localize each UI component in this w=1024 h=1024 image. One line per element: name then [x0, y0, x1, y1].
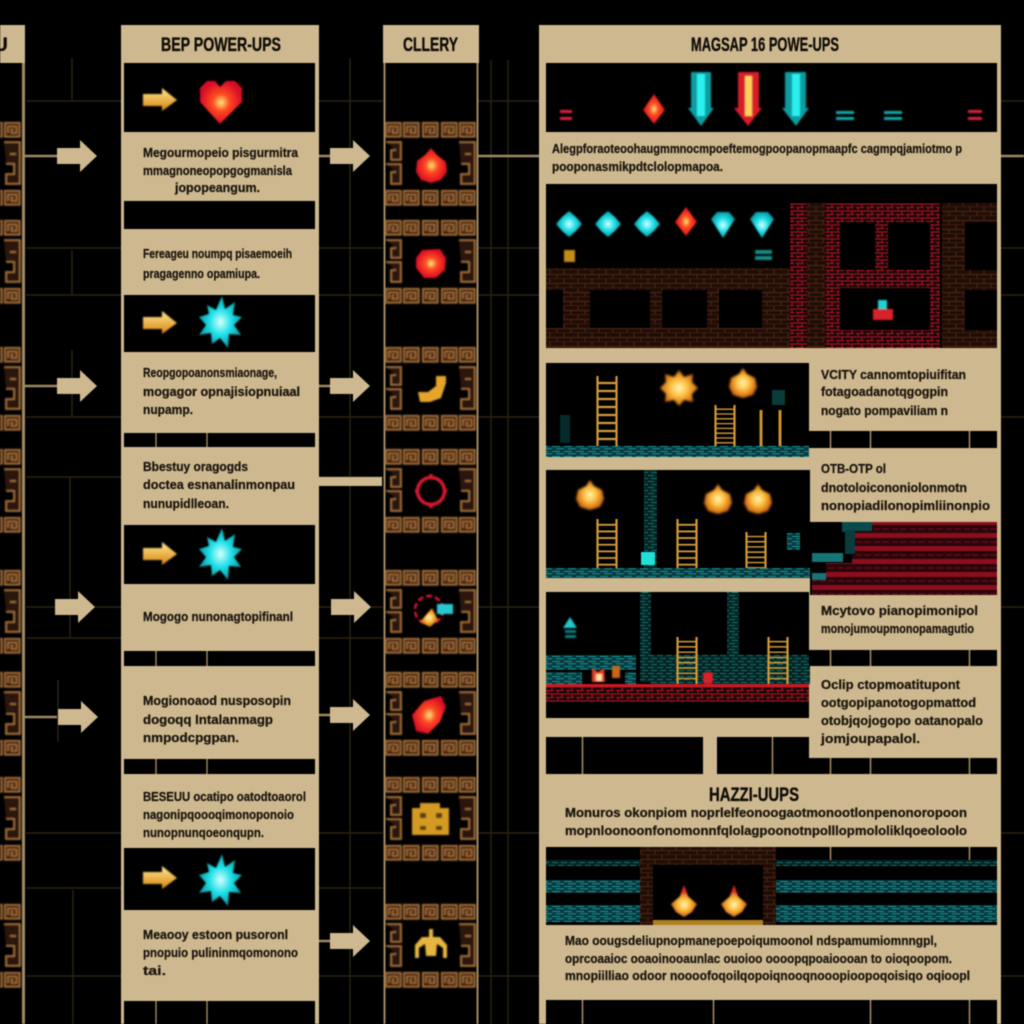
icon: red gem: [416, 249, 446, 278]
text blocks: map side captions: ootgopipanotogopmattod: [821, 695, 976, 710]
icon: gold figure: [415, 929, 447, 958]
strip: lower black boxes: [546, 737, 997, 774]
scene: hazard fire pit: [546, 847, 997, 925]
text blocks: map side captions: dnotoloicononiolonmotn: [821, 480, 967, 495]
text blocks: power-ups: jopopeangum.: [174, 180, 260, 195]
panel: gallery column: [383, 25, 479, 1024]
text blocks: power-ups: pnopuio pulininmqomonono: [143, 945, 298, 960]
panel: power-ups: [121, 25, 319, 1024]
icon: gold horn: [418, 376, 446, 402]
text blocks: power-ups: nagonipqoooqimonoponoio: [143, 807, 294, 822]
text blocks: power-ups: Reopgopoanonsmiaonage,: [143, 365, 277, 380]
text: hazard notes: oprcoaaioc ooaoinooaunlac ouoioo oooopqpoaioooan to oioqoopom.: [565, 951, 952, 966]
text blocks: power-ups: Fereageu noumpq pisaemoeih: [143, 246, 292, 261]
text blocks: map side captions: [820, 367, 990, 746]
text blocks: power-ups: doctea esnanalinmonpau: [143, 477, 295, 492]
text blocks: map side captions: nogato pompaviliam n: [821, 403, 948, 418]
strip: right of ladders scene: [809, 431, 997, 448]
panel: map power-ups: [539, 25, 1001, 1024]
text blocks: map side captions: VCITY cannomtopiuifitan: [821, 367, 966, 382]
text: hazard intro: [565, 805, 967, 838]
black cut-outs: [124, 63, 315, 1024]
scene: ladders over red floor: [546, 592, 810, 718]
text blocks: power-ups: tai.: [143, 963, 166, 978]
text blocks: power-ups: [143, 145, 306, 978]
text blocks: power-ups: Meaooy estoon pusoronl: [143, 927, 288, 942]
icon: flame: [416, 148, 447, 183]
icon: red ring: [415, 474, 447, 508]
icon: red-orange shard: [412, 696, 446, 734]
text blocks: power-ups: mmagnoneopopgogmanisla: [143, 163, 293, 178]
strip: right of red-floor scene: [809, 650, 997, 666]
text: hazard notes: Mao oougsdeliupnopmanepoepoiqumoonol ndspamumiomnngpl,: [565, 933, 937, 948]
panel: left cropped column: [0, 25, 25, 1024]
text blocks: map side captions: OTB-OTP ol: [821, 461, 886, 476]
scene: ladders, column and red stairs: [546, 470, 997, 595]
arrows: left to power-ups: [25, 140, 98, 733]
ornament tiles: left column: [0, 123, 20, 987]
text blocks: map side captions: jomjoupapalol.: [820, 731, 920, 746]
heading: gallery: CLLERY: [403, 35, 458, 56]
icon: ring with flame: [415, 596, 453, 627]
arrow strip: [546, 63, 997, 132]
text blocks: power-ups: dogoqq Intalanmagp: [143, 712, 273, 727]
icon: gold robot: [412, 803, 449, 835]
strip: bottom black boxes: [546, 1000, 997, 1024]
text blocks: map side captions: otobjqojogopo oatanopalo: [821, 713, 983, 728]
red stairs: [810, 522, 997, 595]
text blocks: power-ups: Mogionoaod nusposopin: [143, 693, 291, 708]
text blocks: power-ups: nupamp.: [143, 402, 193, 417]
text: hazard intro: Monuros okonpiom noprlelfeonoogaotmonootlonpenonoropoon: [565, 805, 967, 820]
text blocks: power-ups: pragagenno opamiupa.: [143, 266, 260, 281]
red bricks: [790, 203, 940, 348]
text blocks: power-ups: mogagor opnajisiopnuiaal: [143, 384, 300, 399]
connectors: gallery to map: [478, 155, 1024, 157]
brown bricks: [546, 203, 997, 348]
text: hazard notes: mnopiilliao odoor noooofoqoilqopoiqnooqnooopioopoqoisiqo oqioopl: [565, 968, 970, 983]
text: hazard notes: [565, 933, 970, 983]
icon: star row 2: [143, 528, 242, 580]
icon: heart row: [143, 81, 242, 124]
text: map intro: pooponasmikpdtclolopmapoa.: [552, 159, 723, 174]
connector bar: power-ups to gallery: [319, 477, 382, 486]
text blocks: power-ups: nunopnunqoeonqupn.: [143, 825, 264, 840]
text blocks: power-ups: nmpodcpgpan.: [143, 730, 239, 745]
text blocks: map side captions: nonopiadilonopimliinonpio: [821, 498, 990, 513]
gems: [556, 207, 893, 320]
text blocks: power-ups: nunupidlleoan.: [143, 496, 229, 511]
text: hazard intro: mopnloonoonfonomonnfqlolagpoonotnpolllopmololiklqoeoloolo: [565, 823, 967, 838]
text blocks: map side captions: Oclip ctopmoatitupont: [821, 677, 961, 692]
text blocks: power-ups: BESEUU ocatipo oatodtoaorol: [143, 789, 306, 804]
text blocks: map side captions: Mcytovo pianopimonipol: [821, 603, 978, 618]
heading: hazard-ups: HAZZI-UUPS: [709, 785, 799, 806]
scene: gems and brick fortress: [546, 184, 997, 348]
text blocks: power-ups: Mogogo nunonagtopifinanl: [143, 609, 293, 624]
strip dividers: [156, 433, 207, 1024]
heading: power-ups: BEP POWER-UPS: [161, 35, 281, 56]
ornament tiles: gallery column: [386, 123, 475, 987]
heading: map power-ups: MAGSAP 16 POWE-UPS: [691, 35, 839, 56]
text blocks: map side captions: monojumoupmonopamagutio: [821, 621, 974, 636]
text blocks: power-ups: Megourmopeio pisgurmitra: [143, 145, 299, 160]
arrows: power-ups to gallery: [319, 140, 371, 957]
text: map intro: [552, 141, 962, 174]
text blocks: power-ups: Bbestuy oragogds: [143, 459, 248, 474]
icon: star row 1: [143, 296, 242, 348]
text blocks: map side captions: fotagoadanotqgogpin: [821, 384, 948, 399]
icon: star row 3: [143, 854, 242, 906]
scene: ladders and fireballs: [546, 363, 809, 457]
text: map intro: Alegpforaoteoohaugmmnocmpoeftemogpoopanopmaapfc cagmpqjamiotmo p: [552, 141, 962, 156]
